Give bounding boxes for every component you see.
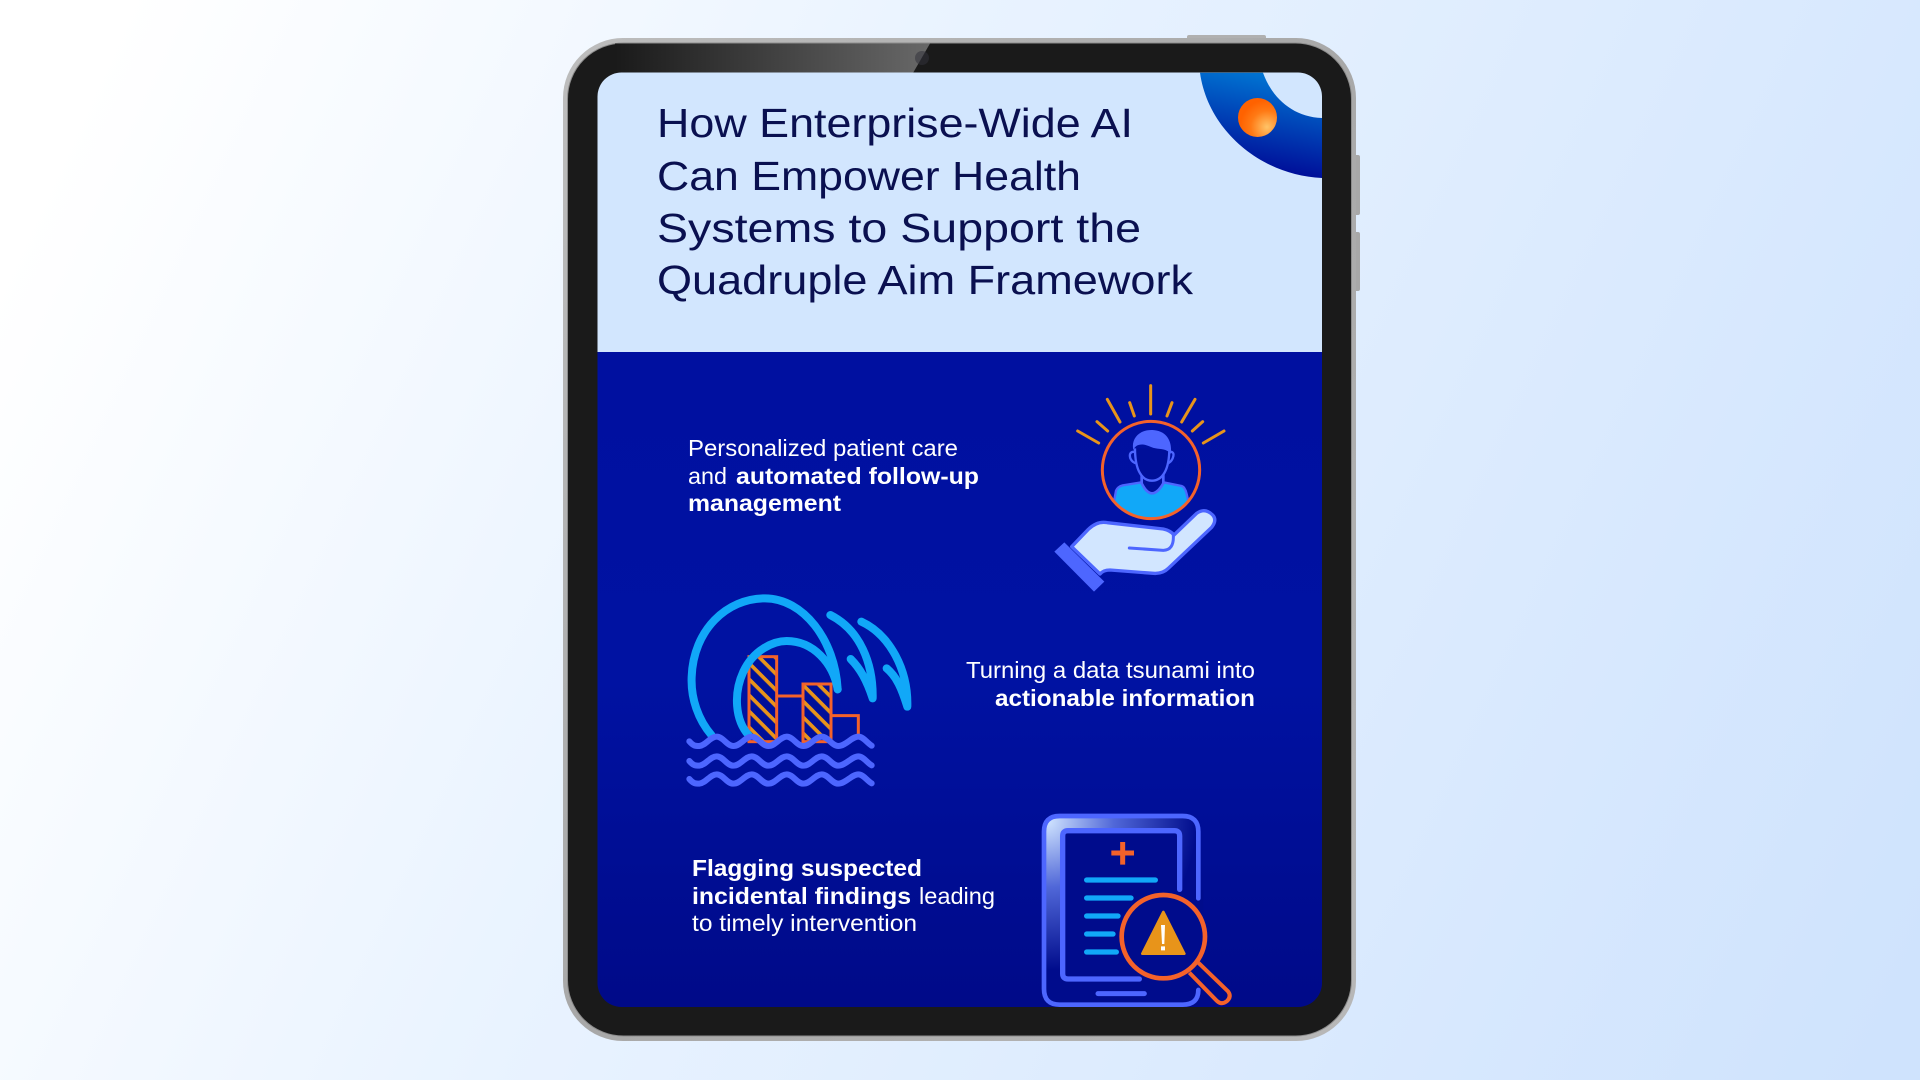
text block: personalized care: and	[688, 463, 727, 489]
finger line	[1129, 536, 1173, 550]
light rays	[1078, 386, 1224, 443]
tablet outline	[1044, 816, 1203, 1005]
tidal wave arcs	[692, 598, 907, 735]
side volume up button	[1354, 155, 1360, 215]
medical cross	[1111, 842, 1134, 865]
panel: header	[597, 72, 1323, 352]
title: Systems to Support the	[657, 205, 1141, 251]
icon: medical report with magnifier	[1044, 816, 1230, 1005]
bezel glare	[615, 44, 930, 73]
text block: personalized care: management	[688, 490, 841, 516]
text block: incidental findings	[692, 855, 995, 936]
tablet device	[563, 35, 1360, 1041]
text block: incidental findings: incidental findings	[692, 883, 911, 909]
bottom pill	[1098, 986, 1144, 1001]
text block: personalized care	[688, 435, 979, 516]
exclamation mark	[1161, 925, 1165, 950]
open hand	[1072, 511, 1215, 574]
text block: data tsunami: Turning a data tsunami into	[966, 657, 1255, 683]
panel: blue body	[597, 352, 1323, 1008]
magnifier lens	[1122, 895, 1205, 978]
top power button	[1187, 35, 1266, 41]
text block: incidental findings: to timely intervention	[692, 910, 917, 936]
icon: hand holding patient	[1054, 386, 1224, 592]
tablet black bezel	[568, 43, 1352, 1036]
text block: personalized care: automated follow-up	[736, 463, 979, 489]
side volume down button	[1354, 232, 1360, 291]
corner ring decoration	[1200, 73, 1322, 178]
report page outline	[1063, 831, 1180, 979]
text block: incidental findings: leading	[919, 883, 995, 909]
tablet silver frame	[563, 38, 1356, 1041]
front camera	[915, 51, 929, 65]
screen	[597, 72, 1323, 1008]
report text lines	[1087, 880, 1155, 952]
city buildings	[749, 657, 858, 742]
title	[657, 100, 1194, 303]
orange dot	[1238, 98, 1277, 137]
title: How Enterprise-Wide AI	[657, 100, 1133, 146]
title: Quadruple Aim Framework	[657, 257, 1194, 303]
warning triangle	[1142, 912, 1184, 954]
title: Can Empower Health	[657, 153, 1081, 199]
patient portrait	[1102, 421, 1200, 523]
cuff	[1054, 542, 1104, 592]
text block: personalized care: Personalized patient care	[688, 435, 958, 461]
text block: data tsunami	[966, 657, 1255, 711]
text block: incidental findings: Flagging suspected	[692, 855, 922, 881]
magnifier handle	[1189, 963, 1230, 1003]
text block: data tsunami: actionable information	[995, 685, 1255, 711]
water ripples	[689, 737, 872, 784]
icon: data tsunami	[689, 598, 907, 784]
